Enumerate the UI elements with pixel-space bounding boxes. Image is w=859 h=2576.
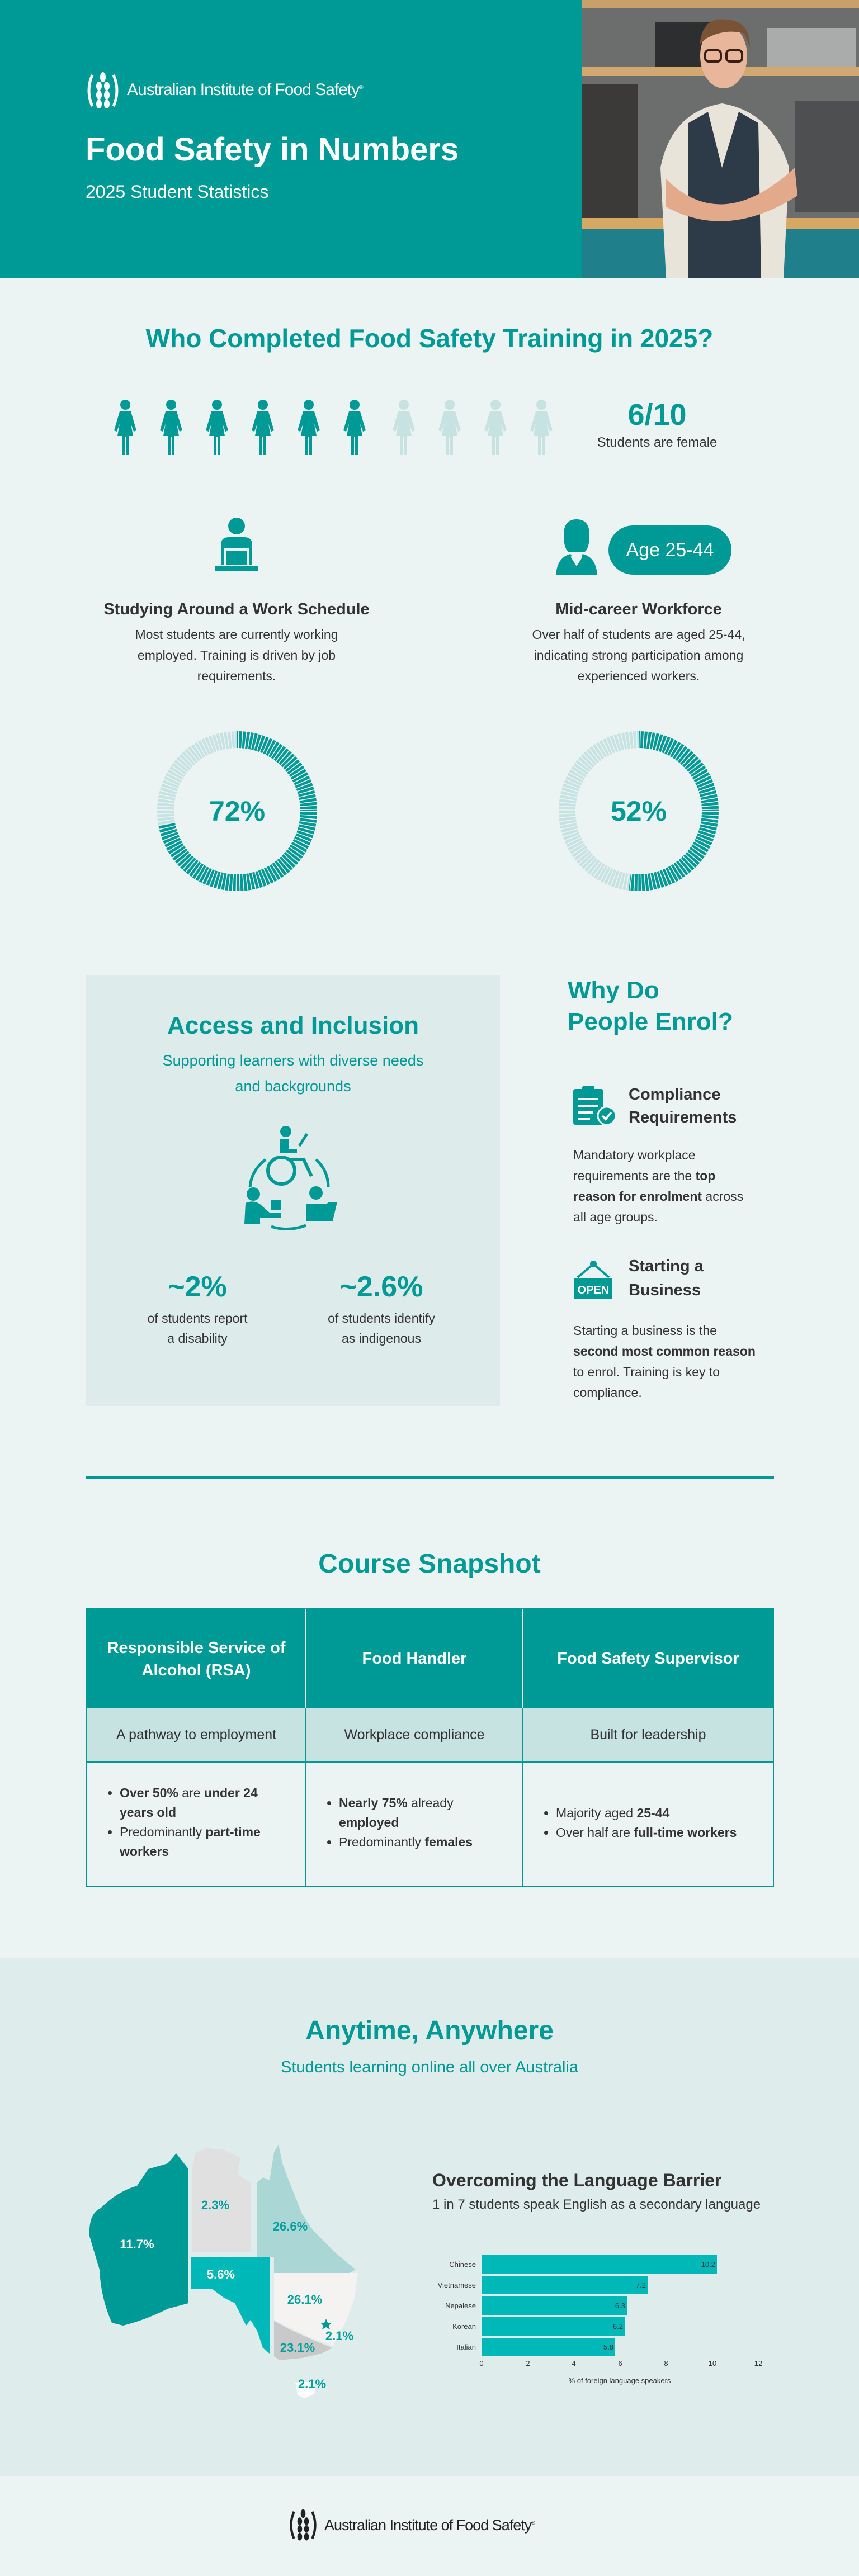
text: starting a business: [629, 1257, 704, 1299]
stat: 6/10: [597, 398, 717, 450]
map: australia by state: 2.1%: [325, 2329, 353, 2343]
bar chart: foreign language speakers: Korean: [452, 2322, 476, 2331]
block: mid-career workforce: experienced workers.: [578, 669, 700, 683]
map: australia by state: 23.1%: [280, 2341, 315, 2355]
details row: Predominantly females: [339, 1835, 473, 1849]
donut chart: 52%: 52%: [611, 795, 667, 827]
stat: indigenous: ~2.6%: [340, 1271, 423, 1303]
header row: [87, 1609, 773, 1708]
block: mid-career workforce: indicating strong participation among: [534, 648, 743, 662]
bar chart: foreign language speakers: 6.2: [613, 2322, 623, 2331]
bar chart: foreign language speakers: Vietnamese: [438, 2281, 476, 2289]
text: compliance body: all age groups.: [573, 1210, 658, 1224]
block: studying around a work schedule: requirements.: [197, 669, 276, 683]
subheading: Supporting learners with diverse needs: [163, 1052, 423, 1069]
text: business body: to enrol. Training is key to: [573, 1365, 720, 1379]
heading: course snapshot: Course Snapshot: [318, 1549, 541, 1579]
logo: Australian Institute of Food Safety®: [127, 80, 363, 99]
bar chart: foreign language speakers: 8: [664, 2359, 668, 2367]
map: australia by state: 5.6%: [207, 2267, 235, 2281]
subheading: [163, 1052, 423, 1095]
text: business body: [573, 1323, 756, 1400]
pill: Age 25-44: Age 25-44: [626, 539, 714, 561]
text: compliance body: Mandatory workplace: [573, 1148, 696, 1162]
bar chart: foreign language speakers: 12: [754, 2359, 762, 2367]
stat: indigenous: as indigenous: [342, 1331, 421, 1346]
bar chart: foreign language speakers: 4: [572, 2359, 576, 2367]
footer logo: Australian Institute of Food Safety®: [324, 2517, 535, 2534]
icon: open sign: [574, 1261, 612, 1299]
icon: inclusion circle: [244, 1126, 337, 1230]
details row: [108, 1763, 737, 1886]
block: studying around a work schedule: employed. Training is driven by job: [138, 648, 336, 662]
heading: Access and Inclusion: [167, 1012, 419, 1039]
header row: Food Handler: [362, 1650, 466, 1668]
icon: open sign: OPEN: [578, 1284, 609, 1296]
header row: Food Safety Supervisor: [557, 1650, 739, 1668]
stat: indigenous: [328, 1271, 435, 1346]
header banner: [0, 0, 859, 278]
pill: Age 25-44: [608, 525, 731, 575]
bar chart: foreign language speakers: [437, 2255, 762, 2385]
stat: disability: a disability: [167, 1331, 228, 1346]
details row: Over 50% are under 24 years old: [120, 1786, 258, 1820]
panel: access and inclusion: [86, 975, 500, 1406]
header row: Responsible Service of: [107, 1639, 286, 1657]
subheading: and backgrounds: [235, 1078, 351, 1095]
stat: disability: ~2%: [168, 1271, 227, 1303]
text: starting a business: Business: [629, 1281, 701, 1299]
panel: anytime anywhere: [0, 1958, 859, 2476]
subtitle: 2025 Student Statistics: [86, 182, 268, 202]
stat: 6/10: 6/10: [627, 398, 687, 432]
block: mid-career workforce: [532, 600, 745, 683]
text: compliance body: reason for enrolment across: [573, 1189, 743, 1204]
block: studying around a work schedule: Studying Around a Work Schedule: [103, 600, 370, 618]
tagline row: Workplace compliance: [344, 1727, 485, 1742]
map: australia by state: 11.7%: [120, 2237, 154, 2251]
logo: [87, 72, 364, 108]
heading: Anytime, Anywhere: [305, 2016, 554, 2045]
icon row: 6 of 10 female: [114, 400, 553, 455]
donut chart: 72%: [157, 731, 317, 891]
bar chart: foreign language speakers: 7.2: [636, 2281, 646, 2289]
donut chart: 52%: [559, 731, 719, 891]
bar chart: foreign language speakers: 6: [618, 2359, 622, 2367]
bar chart: foreign language speakers: 0: [479, 2359, 484, 2367]
bar chart: foreign language speakers: 2: [526, 2359, 530, 2367]
text: compliance requirements: [629, 1086, 737, 1126]
text: business body: compliance.: [573, 1385, 642, 1400]
text: compliance requirements: Compliance: [629, 1086, 720, 1104]
map: australia by state: [89, 2144, 358, 2398]
bar chart: foreign language speakers: 10: [709, 2359, 716, 2367]
text: starting a business: Starting a: [629, 1257, 704, 1275]
bar chart: foreign language speakers: Italian: [456, 2343, 476, 2351]
details row: Majority aged 25-44: [556, 1806, 669, 1820]
heading: who completed: Who Completed Food Safety Training in 2025?: [146, 324, 713, 353]
donut chart: 72%: 72%: [209, 795, 265, 827]
heading: why do people enrol: People Enrol?: [568, 1008, 733, 1035]
stat: 6/10: Students are female: [597, 435, 717, 450]
icon: laptop worker: [215, 518, 258, 571]
heading: why do people enrol: Why Do: [568, 977, 659, 1004]
block: mid-career workforce: Mid-career Workforce: [555, 600, 722, 618]
text: compliance requirements: Requirements: [629, 1109, 737, 1126]
details row: Predominantly part-time workers: [120, 1825, 261, 1859]
chart heading: language barrier: Overcoming the Language Barrier: [432, 2170, 721, 2190]
table: course snapshot: [86, 1608, 774, 1887]
bar chart: foreign language speakers: Nepalese: [445, 2302, 476, 2310]
bar chart: foreign language speakers: 6.3: [615, 2302, 625, 2310]
bar chart: foreign language speakers: 10.2: [701, 2260, 715, 2269]
tagline row: A pathway to employment: [116, 1727, 276, 1742]
map: australia by state: 2.3%: [201, 2198, 229, 2212]
photo: café worker: [582, 0, 859, 278]
heading: why do people enrol: [568, 977, 733, 1035]
details row: Over half are full-time workers: [556, 1825, 737, 1840]
details row: Nearly 75% already employed: [339, 1796, 454, 1830]
map: australia by state: 26.1%: [287, 2293, 322, 2307]
text: compliance body: [573, 1148, 743, 1224]
chart subheading: 1 in 7 students speak English as a secondary language: [432, 2197, 761, 2212]
block: mid-career workforce: Over half of students are aged 25-44,: [532, 627, 745, 642]
map: australia by state: 2.1%: [298, 2377, 326, 2391]
icon: woman: [556, 519, 597, 575]
tagline row: Built for leadership: [590, 1727, 706, 1742]
bar chart: foreign language speakers: % of foreign language speakers: [569, 2376, 671, 2385]
footer logo: [290, 2509, 535, 2540]
stat: disability: [148, 1271, 247, 1346]
text: business body: Starting a business is the: [573, 1323, 717, 1338]
bar chart: foreign language speakers: Chinese: [449, 2260, 476, 2269]
title: Food Safety in Numbers: [86, 131, 459, 168]
tagline row: [87, 1708, 773, 1763]
bar chart: foreign language speakers: 5.8: [603, 2343, 613, 2351]
block: studying around a work schedule: Most students are currently working: [135, 627, 338, 642]
text: business body: second most common reason: [573, 1344, 756, 1358]
block: studying around a work schedule: [103, 600, 370, 683]
header row: Alcohol (RSA): [142, 1661, 251, 1679]
stat: indigenous: of students identify: [328, 1311, 435, 1325]
map: australia by state: 26.6%: [273, 2219, 308, 2233]
subheading: Students learning online all over Australia: [281, 2058, 578, 2076]
stat: disability: of students report: [148, 1311, 247, 1325]
text: compliance body: requirements are the top: [573, 1168, 715, 1183]
icon: clipboard check: [573, 1086, 615, 1125]
